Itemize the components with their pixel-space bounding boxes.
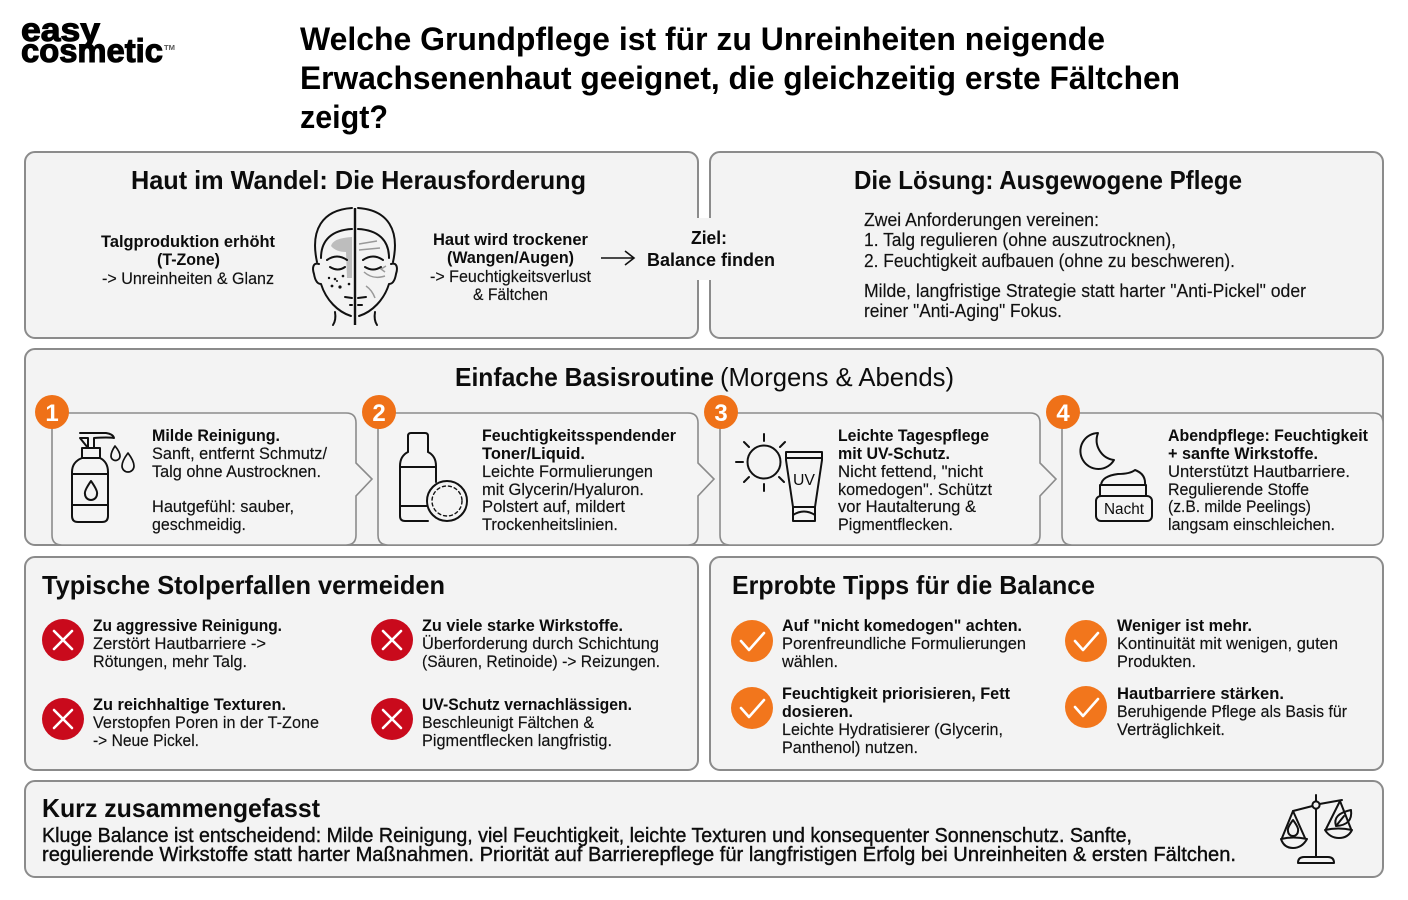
- text: Talgproduktion: (T-Zone): [157, 251, 220, 269]
- text: mit Glycerin/Hyaluron.: [482, 481, 644, 499]
- item: Weniger ist mehr: Weniger ist mehr.: [1117, 617, 1252, 635]
- step 2: [362, 395, 714, 545]
- text: + sanfte Wirkstoffe.: [1168, 445, 1318, 463]
- item: Feuchtigkeit priorisieren: Leichte Hydratisierer (Glycerin,: [782, 721, 1003, 739]
- step 3: [704, 395, 1056, 545]
- logo: easy cosmetic: cosmetic: [21, 32, 163, 69]
- step 4: Nacht: [1104, 501, 1145, 518]
- text: Talgproduktion: Talgproduktion erhöht: [101, 233, 275, 251]
- icon: toner bottle and pad: [400, 433, 467, 521]
- text: [838, 427, 992, 534]
- title: Welche Grundpflege ist für zu Unreinheiten neigende: [300, 21, 1105, 57]
- text: Haut wird trockener: & Fältchen: [473, 286, 548, 304]
- text: Haut wird trockener: (Wangen/Augen): [447, 249, 574, 267]
- summary text: Kluge Balance ist entscheidend: Milde Reinigung, viel Feuchtigkeit, leichte Texturen und konsequenter Sonnenschutz. Sanfte,: [42, 825, 1132, 847]
- text: Hautgefühl: sauber,: [152, 498, 294, 516]
- heading: Basisroutine: [455, 362, 954, 392]
- step 2: 2: [372, 400, 386, 427]
- text: Polstert auf, mildert: [482, 498, 625, 516]
- text: [152, 427, 327, 534]
- item: reichhaltige Texturen: [42, 696, 319, 750]
- text: Sanft, entfernt Schmutz/: [152, 445, 327, 463]
- text: Anforderungen: 1. Talg regulieren (ohne auszutrocknen),: [864, 230, 1176, 250]
- panel: Tipps: [710, 557, 1383, 770]
- item: nicht komedogen: wählen.: [781, 653, 838, 671]
- item: Weniger ist mehr: Kontinuität mit wenigen, guten: [1117, 635, 1338, 653]
- text: Anforderungen: 2. Feuchtigkeit aufbauen (ohne zu beschweren).: [864, 251, 1235, 271]
- arrow: [601, 251, 634, 265]
- text: Leichte Formulierungen: [482, 463, 653, 481]
- heading: Ausgewogene Pflege: Die Lösung: Ausgewogene Pflege: [854, 165, 1242, 195]
- item: Hautbarriere stärken: Beruhigende Pflege als Basis für: [1117, 703, 1347, 721]
- panel: Kurz zusammengefasst: [25, 781, 1383, 877]
- text: Regulierende Stoffe: [1168, 481, 1309, 499]
- text: (z.B. milde Peelings): [1168, 498, 1311, 516]
- logo: easy cosmetic: [21, 11, 175, 69]
- title: zeigt?: [300, 99, 388, 135]
- title: [300, 21, 1180, 135]
- callout: Ziel: Balance finden: [647, 249, 775, 270]
- icon: moon and night cream: [1080, 433, 1152, 521]
- item: UV-Schutz: Pigmentflecken langfristig.: [422, 732, 612, 750]
- icon: face: [313, 208, 397, 325]
- text: Haut wird trockener: Haut wird trockener: [433, 231, 589, 249]
- text: Anforderungen: [864, 210, 1306, 321]
- item: Hautbarriere stärken: Verträglichkeit.: [1117, 721, 1225, 739]
- heading: Herausforderung: Haut im Wandel: Die Herausforderung: [131, 165, 586, 195]
- icon: sun and UV tube: [736, 434, 822, 521]
- text: [482, 427, 677, 534]
- logo: easy cosmetic: easy: [21, 11, 101, 48]
- step 1: 1: [45, 400, 59, 427]
- text: Milde Reinigung.: [152, 427, 280, 445]
- item: starke Wirkstoffe: [371, 617, 660, 671]
- text: Talgproduktion: -> Unreinheiten & Glanz: [102, 270, 274, 288]
- panel: Die Lösung: [710, 152, 1383, 338]
- heading: Basisroutine: (Morgens & Abends): [720, 362, 954, 392]
- text: Abendpflege: Feuchtigkeit: [1168, 427, 1368, 445]
- text: Anforderungen: Zwei Anforderungen vereinen:: [864, 210, 1099, 230]
- callout: Ziel: Ziel:: [691, 227, 727, 248]
- step 3: 3: [714, 400, 728, 427]
- panel: Haut im Wandel: [25, 152, 698, 338]
- item: Weniger ist mehr: [1065, 617, 1338, 671]
- item: starke Wirkstoffe: Zu viele starke Wirkstoffe.: [422, 617, 623, 635]
- item: starke Wirkstoffe: (Säuren, Retinoide) -> Reizungen.: [422, 653, 660, 671]
- item: starke Wirkstoffe: Überforderung durch Schichtung: [422, 635, 659, 653]
- item: UV-Schutz: UV-Schutz vernachlässigen.: [422, 696, 632, 714]
- text: Talg ohne Austrocknen.: [152, 463, 321, 481]
- step 4: 4: [1056, 400, 1070, 427]
- text: Anforderungen: Milde, langfristige Strategie statt harter "Anti-Pickel" oder: [864, 281, 1306, 301]
- item: UV-Schutz: Beschleunigt Fältchen &: [422, 714, 594, 732]
- logo: easy cosmetic: TM: [164, 45, 175, 52]
- item: reichhaltige Texturen: -> Neue Pickel.: [93, 732, 199, 750]
- text: Talgproduktion: [101, 233, 275, 288]
- text: [1168, 427, 1368, 534]
- item: nicht komedogen: [731, 617, 1026, 671]
- icon: scales: [1281, 795, 1352, 863]
- text: Trockenheitslinien.: [482, 516, 618, 534]
- text: Unterstützt Hautbarriere.: [1168, 463, 1350, 481]
- item: aggressive Reinigung: Zu aggressive Reinigung.: [93, 617, 282, 635]
- item: nicht komedogen: Porenfreundliche Formulierungen: [782, 635, 1026, 653]
- summary text: regulierende Wirkstoffe statt harter Maßnahmen. Priorität auf Barrierepflege für langfristigen Erfolg bei Unreinheiten & ersten Fältchen.: [42, 844, 1236, 866]
- text: Feuchtigkeitsspendender: [482, 427, 677, 445]
- callout: Ziel: [640, 218, 782, 280]
- text: langsam einschleichen.: [1168, 516, 1335, 534]
- item: reichhaltige Texturen: Verstopfen Poren in der T-Zone: [93, 714, 319, 732]
- item: Weniger ist mehr: Produkten.: [1117, 653, 1196, 671]
- text: komedogen". Schützt: [838, 481, 992, 499]
- summary text: [42, 825, 1236, 866]
- text: vor Hautalterung &: [838, 498, 976, 516]
- text: Haut wird trockener: [430, 231, 591, 304]
- item: Feuchtigkeit priorisieren: Panthenol) nutzen.: [782, 739, 918, 757]
- item: aggressive Reinigung: [42, 617, 282, 671]
- item: UV-Schutz: [371, 696, 632, 750]
- step 1: [35, 395, 372, 545]
- item: Feuchtigkeit priorisieren: dosieren.: [782, 703, 853, 721]
- panel: Basisroutine: [25, 349, 1383, 545]
- heading: Stolperfallen: Typische Stolperfallen vermeiden: [42, 570, 445, 600]
- title: Erwachsenenhaut geeignet, die gleichzeitig erste Fältchen: [300, 60, 1180, 96]
- heading: Basisroutine: Einfache Basisroutine: [455, 362, 714, 392]
- item: Feuchtigkeit priorisieren: [731, 685, 1010, 757]
- text: Nicht fettend, "nicht: [838, 463, 983, 481]
- item: Feuchtigkeit priorisieren: Feuchtigkeit priorisieren, Fett: [782, 685, 1010, 703]
- panel: Stolperfallen: [25, 557, 698, 770]
- text: Pigmentflecken.: [838, 516, 953, 534]
- text: Anforderungen: reiner "Anti-Aging" Fokus.: [864, 301, 1062, 321]
- step 4: [1046, 395, 1383, 545]
- item: reichhaltige Texturen: Zu reichhaltige Texturen.: [93, 696, 286, 714]
- item: Hautbarriere stärken: [1065, 685, 1347, 739]
- text: mit UV-Schutz.: [838, 445, 950, 463]
- icon: pump bottle: [72, 433, 134, 522]
- text: Haut wird trockener: -> Feuchtigkeitsverlust: [430, 268, 591, 286]
- text: Leichte Tagespflege: [838, 427, 989, 445]
- step 3: UV: [793, 472, 815, 489]
- item: aggressive Reinigung: Zerstört Hautbarriere ->: [93, 635, 266, 653]
- heading: Kurz zusammengefasst: Kurz zusammengefasst: [42, 793, 320, 823]
- item: aggressive Reinigung: Rötungen, mehr Talg.: [93, 653, 247, 671]
- text: geschmeidig.: [152, 516, 246, 534]
- item: Hautbarriere stärken: Hautbarriere stärken.: [1117, 685, 1284, 703]
- item: nicht komedogen: Auf "nicht komedogen" achten.: [782, 617, 1022, 635]
- heading: Tipps: Erprobte Tipps für die Balance: [732, 570, 1095, 600]
- text: Toner/Liquid.: [482, 445, 585, 463]
